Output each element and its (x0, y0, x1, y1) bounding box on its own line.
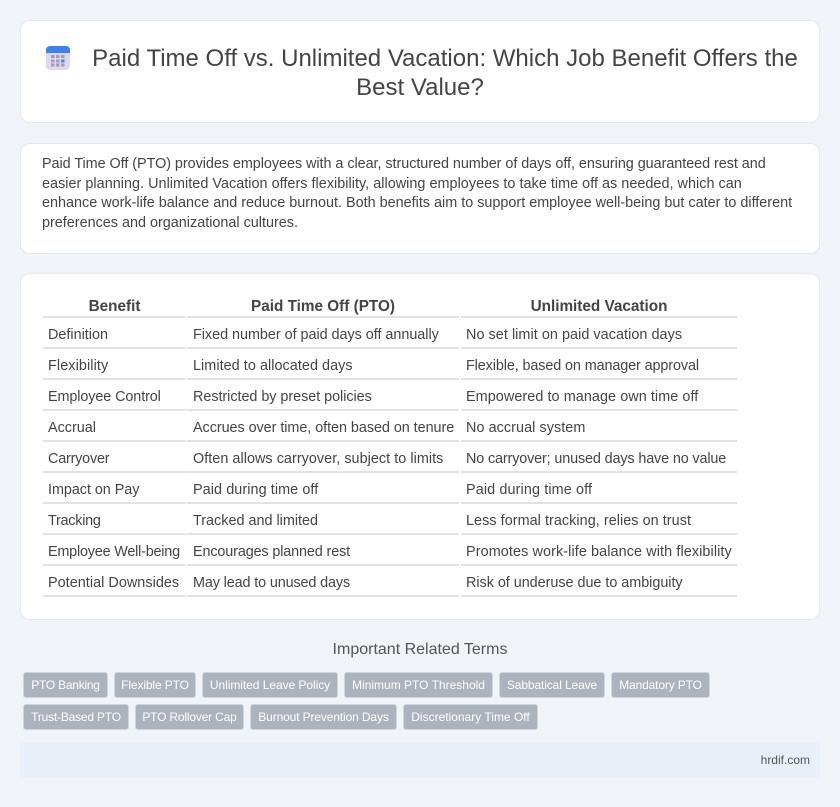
heading: important related terms: Important Related Terms (333, 641, 507, 658)
table row: carryover (43, 451, 737, 473)
table row: employee well-being (43, 544, 737, 566)
tags: related terms: Sabbatical Leave (507, 678, 597, 692)
table row: carryover: Carryover (48, 451, 109, 467)
tags: related terms: Burnout Prevention Days (258, 710, 389, 724)
table row: accrual: No accrual system (466, 420, 585, 436)
text: introduction: preferences and organizational cultures. (42, 215, 298, 231)
table row: employee control: Employee Control (48, 389, 161, 405)
table row: impact on pay: Impact on Pay (48, 482, 139, 498)
table header: Benefit (89, 298, 140, 315)
table header (43, 298, 737, 318)
tags: related terms: Minimum PTO Threshold (352, 678, 485, 692)
table row: impact on pay (43, 482, 737, 504)
table row: potential downsides (43, 575, 737, 597)
table row: accrual (43, 420, 737, 442)
tags: related terms (23, 672, 710, 730)
title (92, 45, 798, 101)
table row: potential downsides: May lead to unused days (193, 575, 350, 591)
table row: tracking: Tracked and limited (193, 513, 318, 529)
table row: accrual: Accrues over time, often based on tenure (193, 420, 454, 436)
table row: employee well-being: Encourages planned rest (193, 544, 350, 560)
icon: calendar (46, 46, 70, 70)
title: Paid Time Off vs. Unlimited Vacation: Which Job Benefit Offers the (92, 45, 798, 72)
table row: carryover: Often allows carryover, subject to limits (193, 451, 443, 467)
table row: employee control (43, 389, 737, 411)
table row: employee well-being: Employee Well-being (48, 544, 180, 560)
panel: title card (20, 20, 820, 123)
tags: related terms: Trust-Based PTO (31, 710, 121, 724)
tags: related terms: PTO Banking (31, 678, 100, 692)
table header: Paid Time Off (PTO) (251, 298, 395, 315)
table row: flexibility: Flexibility (48, 358, 108, 374)
table row: potential downsides: Potential Downsides (48, 575, 179, 591)
footer source: hrdif.com (761, 753, 810, 767)
text: introduction: easier planning. Unlimited Vacation offers flexibility, allowing employees to take time off as needed, which can (42, 176, 742, 192)
tags: related terms: PTO Rollover Cap (142, 710, 237, 724)
tags: related terms: Unlimited Leave Policy (210, 678, 330, 692)
tags: related terms: Discretionary Time Off (411, 710, 530, 724)
table row: definition: Definition (48, 327, 108, 343)
text: introduction (42, 156, 792, 231)
table row: accrual: Accrual (48, 420, 96, 436)
table row: flexibility: Limited to allocated days (193, 358, 353, 374)
tags: related terms: Mandatory PTO (619, 678, 702, 692)
table row: carryover: No carryover; unused days have no value (466, 451, 726, 467)
table row: tracking (43, 513, 737, 535)
panel: comparison table (20, 273, 820, 620)
table header: Unlimited Vacation (531, 298, 667, 315)
table row: potential downsides: Risk of underuse due to ambiguity (466, 575, 683, 591)
panel: intro paragraph (20, 143, 820, 254)
table row: employee well-being: Promotes work-life balance with flexibility (466, 544, 732, 560)
table row: impact on pay: Paid during time off (466, 482, 592, 498)
text: introduction: enhance work-life balance and reduce burnout. Both benefits aim to support employee well-being but cater to different (42, 195, 792, 211)
tags: related terms: Flexible PTO (121, 678, 189, 692)
table row: employee control: Empowered to manage own time off (466, 389, 698, 405)
table row: definition: Fixed number of paid days off annually (193, 327, 439, 343)
title: Best Value? (356, 74, 484, 101)
table row: tracking: Tracking (48, 513, 101, 529)
table row: flexibility: Flexible, based on manager approval (466, 358, 699, 374)
table row: impact on pay: Paid during time off (193, 482, 318, 498)
table row: definition: No set limit on paid vacation days (466, 327, 682, 343)
table row: flexibility (43, 358, 737, 380)
footer (20, 743, 820, 777)
text: introduction: Paid Time Off (PTO) provides employees with a clear, structured number of days off, ensuring guaranteed rest and (42, 156, 766, 172)
table row: definition (43, 327, 737, 349)
table row: tracking: Less formal tracking, relies on trust (466, 513, 691, 529)
table row: employee control: Restricted by preset policies (193, 389, 372, 405)
